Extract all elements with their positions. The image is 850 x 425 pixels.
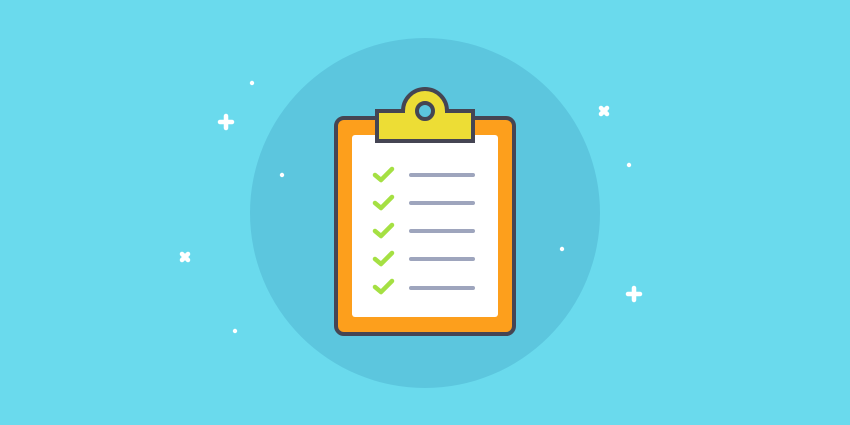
- sparkle: dot lower left: [233, 329, 237, 333]
- sparkle: plus left: [220, 116, 232, 128]
- sparkle: dot mid right: [560, 247, 564, 251]
- sparkle: dot upper right: [627, 163, 631, 167]
- sparkle: cross left: [182, 254, 188, 260]
- clipboard board: [336, 118, 514, 334]
- sparkle: dot mid left: [280, 173, 284, 177]
- check mark 4: [375, 253, 392, 264]
- list line 1: [411, 173, 473, 177]
- check mark 2: [375, 197, 392, 208]
- list line 5: [411, 286, 473, 290]
- check mark 3: [375, 225, 392, 236]
- sparkle: plus right: [628, 288, 640, 300]
- list line 3: [411, 229, 473, 233]
- list line 2: [411, 201, 473, 205]
- clip: [377, 89, 473, 141]
- check mark 1: [375, 169, 392, 180]
- sparkles: [182, 81, 640, 333]
- clip hole: [417, 103, 433, 119]
- sparkle: dot upper left: [250, 81, 254, 85]
- check mark 5: [375, 281, 392, 292]
- clip body: [377, 89, 473, 141]
- paper sheet: [352, 135, 498, 317]
- checklist rows: [375, 169, 473, 292]
- background circle: [250, 38, 600, 388]
- list line 4: [411, 257, 473, 261]
- sparkle: cross right: [601, 108, 607, 114]
